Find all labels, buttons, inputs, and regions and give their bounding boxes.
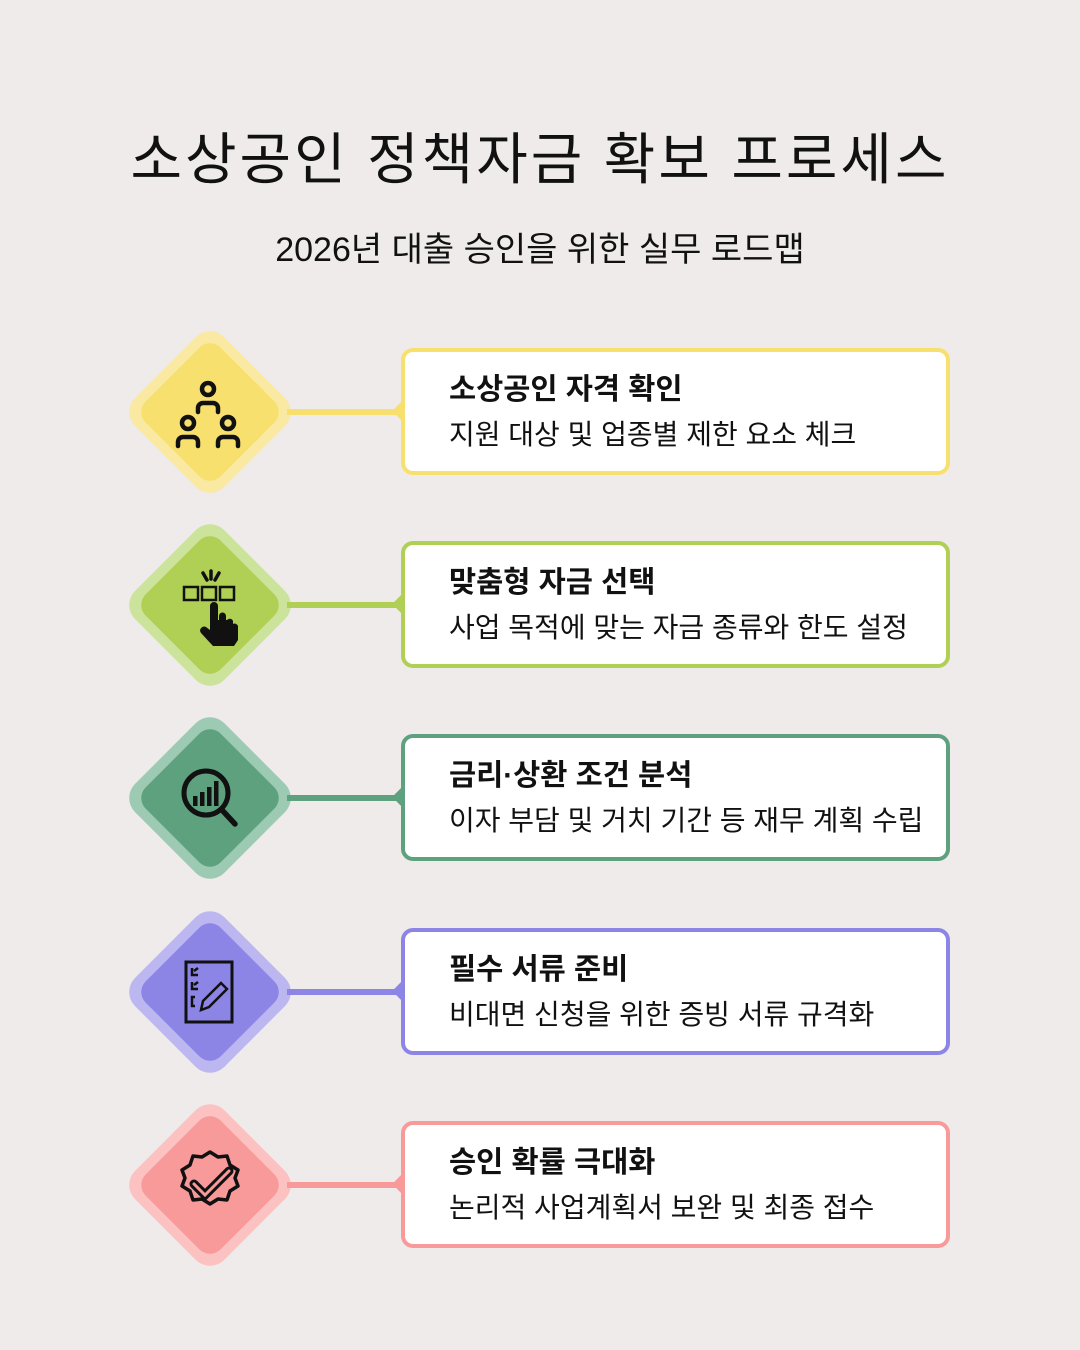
card 3: 이자 부담 및 거치 기간 등 재무 계획 수립 bbox=[449, 805, 923, 836]
card 4 bbox=[401, 928, 950, 1055]
card 5: 논리적 사업계획서 보완 및 최종 접수 bbox=[449, 1192, 874, 1223]
card 4: 필수 서류 준비 bbox=[449, 953, 628, 986]
icon: badge check diamond bbox=[129, 1104, 290, 1266]
step 1 bbox=[129, 331, 950, 493]
card 1 bbox=[401, 348, 950, 475]
card 2: 사업 목적에 맞는 자금 종류와 한도 설정 bbox=[449, 612, 908, 643]
subtitle: 2026년 대출 승인을 위한 실무 로드맵 bbox=[275, 231, 805, 269]
card 2: 맞춤형 자금 선택 bbox=[449, 566, 655, 599]
card 4: 비대면 신청을 위한 증빙 서류 규격화 bbox=[449, 999, 874, 1030]
step 4 bbox=[129, 911, 950, 1073]
icon: magnifier diamond bbox=[129, 717, 290, 879]
card 2 bbox=[401, 541, 950, 668]
card 3 bbox=[401, 734, 950, 861]
icon: people diamond bbox=[129, 331, 290, 493]
icon: click diamond bbox=[129, 524, 290, 686]
card 1: 지원 대상 및 업종별 제한 요소 체크 bbox=[449, 419, 856, 450]
icon: checklist diamond bbox=[129, 911, 290, 1073]
card 5 bbox=[401, 1121, 950, 1248]
step 5 bbox=[129, 1104, 950, 1266]
title: 소상공인 정책자금 확보 프로세스 bbox=[131, 128, 949, 191]
step 3 bbox=[129, 717, 950, 879]
card 3: 금리·상환 조건 분석 bbox=[449, 759, 692, 792]
card 5: 승인 확률 극대화 bbox=[449, 1146, 655, 1179]
card 1: 소상공인 자격 확인 bbox=[449, 373, 683, 406]
step 2 bbox=[129, 524, 950, 686]
